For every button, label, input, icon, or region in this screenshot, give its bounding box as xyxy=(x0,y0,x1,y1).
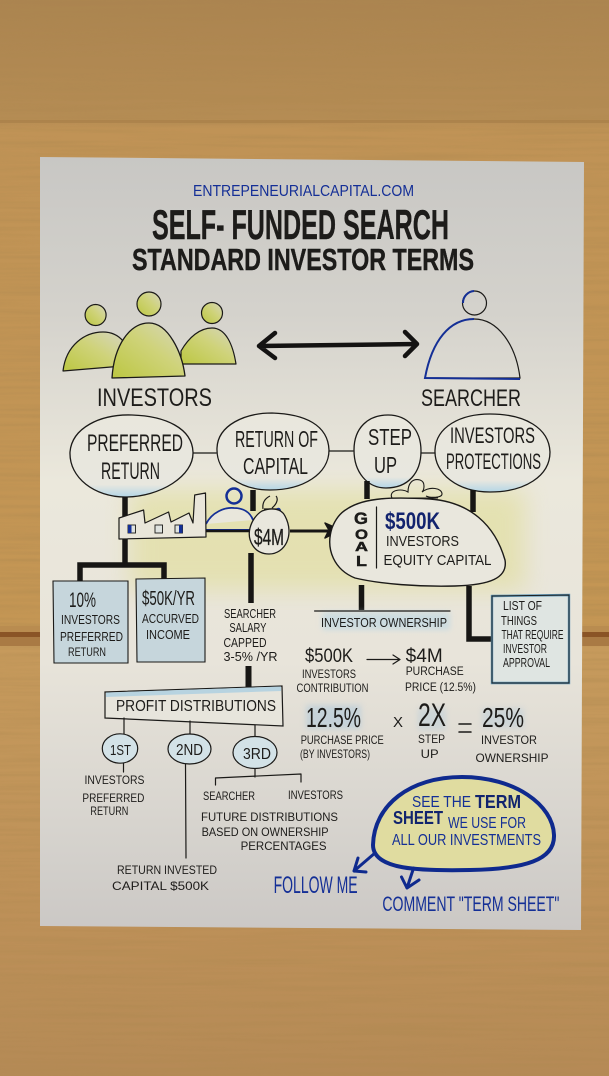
text: searcher salary xyxy=(224,607,278,664)
text: future distributions xyxy=(201,810,338,853)
equation: 12.5% x 2x = 25%: X xyxy=(393,714,403,731)
icon: $4M money bag: $4M xyxy=(254,524,284,550)
callout: see the term sheet: SHEET xyxy=(393,808,443,828)
icon: factory xyxy=(119,493,206,539)
label: searcher: SEARCHER xyxy=(421,385,521,412)
callout: see the term sheet xyxy=(373,777,554,870)
text: $4m purchase price: PURCHASE xyxy=(406,666,464,678)
box: list of things requiring approval xyxy=(492,595,569,683)
thick connector: return of capital xyxy=(251,490,253,603)
icon: $4M money bag xyxy=(249,496,289,554)
text: investors preferred return xyxy=(82,773,145,818)
icon: goal money bag: $500K xyxy=(385,508,441,535)
text: $500k contribution: INVESTORS xyxy=(302,669,356,681)
arrow: contribution to purchase price xyxy=(367,655,400,664)
text: $4m purchase price: $4M xyxy=(406,646,443,667)
investor ownership heading xyxy=(315,611,450,630)
text: future distributions: FUTURE DISTRIBUTIONS xyxy=(201,810,338,824)
icon: goal money bag: INVESTORS xyxy=(386,533,459,550)
equation: 12.5% x 2x = 25%: UP xyxy=(421,747,439,761)
callout: see the term sheet: SEE THE xyxy=(412,794,471,811)
thick connector: investor protections xyxy=(469,490,493,639)
box: list of things requiring approval: THINGS xyxy=(501,614,537,628)
bubble: investors protections: INVESTORS xyxy=(450,423,535,448)
bubble: return of capital xyxy=(217,413,329,490)
paper sheet xyxy=(40,157,584,930)
text: future distributions: PERCENTAGES xyxy=(241,839,327,853)
box: 10% preferred return: INVESTORS xyxy=(61,612,120,627)
icon: searcher xyxy=(425,291,520,379)
equation: 12.5% x 2x = 25%: 25% xyxy=(482,702,524,733)
text: investors preferred return: INVESTORS xyxy=(84,773,144,787)
icon: goal money bag: L xyxy=(356,553,367,570)
box: $50k/yr accrued income: $50K/YR xyxy=(142,588,195,610)
box: $50k/yr accrued income: ACCURVED xyxy=(142,611,199,626)
thick connector: preferred return xyxy=(80,497,164,581)
text: searcher and investors split: SEARCHER xyxy=(203,789,255,803)
text: searcher salary: CAPPED xyxy=(224,636,266,650)
equation: 12.5% x 2x = 25%: (BY INVESTORS) xyxy=(300,747,370,761)
circle: 3rd: 3RD xyxy=(243,746,271,763)
arrow: factory to goal xyxy=(206,523,341,538)
icon: goal money bag: O xyxy=(355,526,368,542)
bubble: return of capital: RETURN OF xyxy=(235,426,318,452)
callout: see the term sheet: TERM xyxy=(475,792,521,812)
icon: goal money bag: G xyxy=(354,509,368,528)
circle: 1st xyxy=(102,734,138,763)
text: searcher salary: SEARCHER xyxy=(224,607,276,621)
callout: see the term sheet: WE USE FOR xyxy=(448,815,526,832)
text: searcher and investors split xyxy=(203,788,343,803)
thick connector: salary to profit distributions xyxy=(246,666,252,688)
arrow: callout to comment xyxy=(402,868,419,888)
box: list of things requiring approval: LIST OF xyxy=(503,599,542,613)
box: 10% preferred return: PREFERRED xyxy=(60,629,123,644)
box: 10% preferred return: RETURN xyxy=(68,645,106,659)
equation: 12.5% x 2x = 25%: OWNERSHIP xyxy=(476,751,548,765)
thick connector: step up xyxy=(362,481,367,610)
box: $50k/yr accrued income: INCOME xyxy=(146,627,190,642)
equation: 12.5% x 2x = 25%: INVESTOR xyxy=(481,733,537,747)
box: list of things requiring approval: THAT REQUIRE xyxy=(502,628,564,642)
text: investors preferred return: RETURN xyxy=(90,804,128,818)
yellow wash xyxy=(130,490,525,590)
equation: 12.5% x 2x = 25%: STEP xyxy=(418,732,445,746)
bubble: step up: UP xyxy=(374,452,397,478)
bubble: investors protections: PROTECTIONS xyxy=(446,449,541,474)
text: $4m purchase price xyxy=(405,646,476,694)
bubble: preferred return: PREFERRED xyxy=(87,430,183,457)
icon: investors group xyxy=(63,292,236,378)
circle: 2nd xyxy=(168,734,211,764)
circle: 3rd xyxy=(233,736,277,768)
text: $500k contribution xyxy=(296,646,368,695)
icon: goal money bag: A xyxy=(355,539,369,554)
box: $50k/yr accrued income xyxy=(136,578,205,662)
equation: 12.5% x 2x = 25% xyxy=(300,697,548,765)
text: $4m purchase price: PRICE (12.5%) xyxy=(405,682,476,694)
label: investors: INVESTORS xyxy=(97,384,212,412)
bubble: investors protections xyxy=(435,414,550,492)
arrow: callout to follow me xyxy=(354,853,375,872)
subtitle: STANDARD INVESTOR TERMS xyxy=(132,242,474,277)
icon: goal money bag: EQUITY CAPITAL xyxy=(384,552,492,569)
equation: 12.5% x 2x = 25%: 12.5% xyxy=(306,702,361,733)
box: list of things requiring approval: INVESTOR xyxy=(503,642,547,656)
text: return invested capital: RETURN INVESTED xyxy=(117,863,217,877)
text: investors preferred return: PREFERRED xyxy=(82,791,145,805)
text: $500k contribution: $500K xyxy=(305,646,353,667)
icon: goal money bag xyxy=(330,480,505,586)
distribution stems xyxy=(124,718,301,858)
bubble connectors xyxy=(193,451,435,453)
text: $500k contribution: CONTRIBUTION xyxy=(296,683,368,695)
circle: 1st: 1ST xyxy=(110,742,131,759)
callout: see the term sheet: ALL OUR INVESTMENTS xyxy=(392,832,541,849)
box: profit distributions xyxy=(105,686,283,726)
box: profit distributions: PROFIT DISTRIBUTIONS xyxy=(116,698,276,715)
investor ownership heading: INVESTOR OWNERSHIP xyxy=(321,615,447,630)
bubble: step up: STEP xyxy=(368,424,412,450)
circle: 2nd: 2ND xyxy=(176,742,203,759)
website url: ENTREPENEURIALCAPITAL.COM xyxy=(193,183,414,200)
double-headed arrow xyxy=(259,332,417,358)
bubble: preferred return xyxy=(70,415,193,497)
text: searcher and investors split: INVESTORS xyxy=(288,788,343,802)
text: return invested capital: CAPITAL $500K xyxy=(112,879,209,893)
bubble: return of capital: CAPITAL xyxy=(243,453,308,479)
box: 10% preferred return: 10% xyxy=(69,589,96,612)
text: future distributions: BASED ON OWNERSHIP xyxy=(202,825,329,839)
icon: searcher on factory xyxy=(206,488,253,530)
text: return invested capital xyxy=(112,863,217,893)
equation: 12.5% x 2x = 25%: 2X xyxy=(418,697,446,733)
bubble: step up xyxy=(354,415,421,488)
box: 10% preferred return xyxy=(53,581,128,663)
bubble: preferred return: RETURN xyxy=(101,458,160,485)
text: searcher salary: SALARY xyxy=(229,621,267,635)
box: list of things requiring approval: APPROVAL xyxy=(503,656,550,670)
text: searcher salary: 3-5% /YR xyxy=(224,650,278,664)
call to action: follow me: FOLLOW ME xyxy=(274,872,358,899)
equation: 12.5% x 2x = 25%: PURCHASE PRICE xyxy=(301,733,384,747)
